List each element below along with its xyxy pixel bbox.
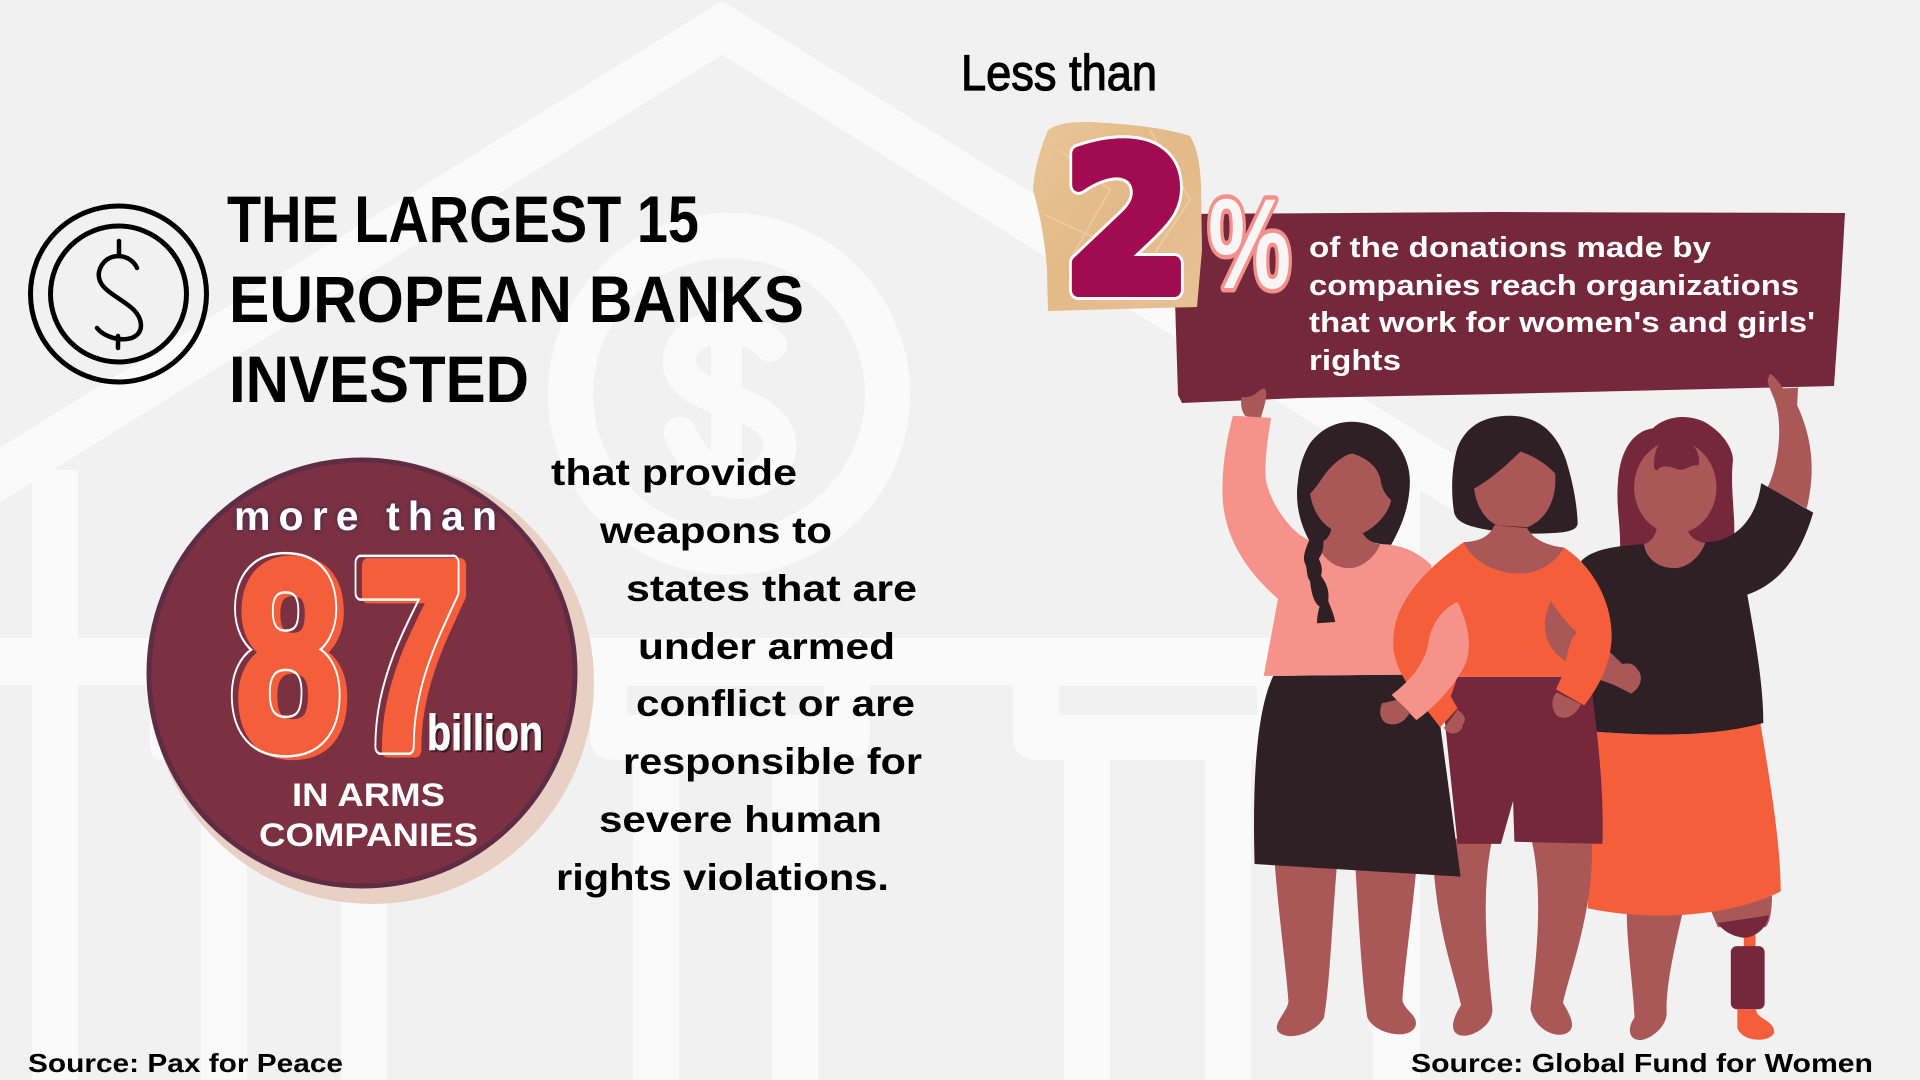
source: global fund for women: Source: Global Fund for Women (1411, 1048, 1873, 1078)
heading: the largest 15 european banks invested: THE LARGEST 15 (227, 182, 699, 256)
percent sign: % (1208, 173, 1291, 315)
woman right (1581, 374, 1813, 1040)
body text: that provide weapons: rights violations. (556, 857, 889, 898)
body text: that provide weapons: that provide (551, 452, 797, 493)
number: 87 fill: 7 (359, 508, 469, 807)
banner text: rights (1309, 345, 1401, 377)
stat circle: 87 billion (149, 460, 594, 904)
banner text: companies reach organizations (1309, 270, 1799, 302)
label: in arms companies (259, 777, 478, 853)
banner: donations statement (1175, 212, 1845, 403)
woman centre upper body (1380, 416, 1612, 733)
illustration: three women holding banner (1222, 374, 1813, 1040)
label: more than: more than (234, 493, 497, 539)
background bank watermark (0, 1, 1500, 1080)
number: 87 fill (238, 508, 469, 807)
label: in arms companies: COMPANIES (259, 817, 478, 853)
number: 87 white outline (230, 552, 460, 758)
paper cutout: 2: 2 (1064, 110, 1190, 337)
source: pax for peace: Source: Pax for Peace (28, 1048, 343, 1078)
banner text (1309, 232, 1815, 377)
number: 87 white outline: 7 (352, 505, 462, 804)
label: in arms companies: IN ARMS (292, 777, 445, 813)
body text: that provide weapons: under armed (638, 626, 895, 667)
number: 87 fill: 8 (238, 508, 348, 807)
body text: that provide weapons: responsible for (623, 741, 922, 782)
heading: less than: Less than (961, 45, 1157, 101)
body text: that provide weapons: severe human (599, 799, 882, 840)
paper cutout: 2: 2 (1064, 110, 1190, 337)
body text: that provide weapons: states that are (626, 568, 917, 609)
body text: that provide weapons (551, 452, 922, 898)
icon: dollar coin (30, 206, 206, 382)
banner text: that work for women's and girls' (1309, 307, 1815, 339)
woman left (1222, 388, 1461, 1036)
woman centre lower body (1432, 677, 1603, 1036)
body text: that provide weapons: weapons to (599, 510, 832, 551)
heading: the largest 15 european banks invested: EUROPEAN BANKS (229, 262, 804, 336)
heading: the largest 15 european banks invested: INVESTED (229, 342, 529, 416)
banner text: of the donations made by (1309, 232, 1711, 264)
number: 87 white outline: 8 (230, 505, 341, 804)
label: billion: billion (427, 705, 543, 761)
body text: that provide weapons: conflict or are (636, 683, 915, 724)
heading: the largest 15 european banks invested (227, 182, 804, 416)
